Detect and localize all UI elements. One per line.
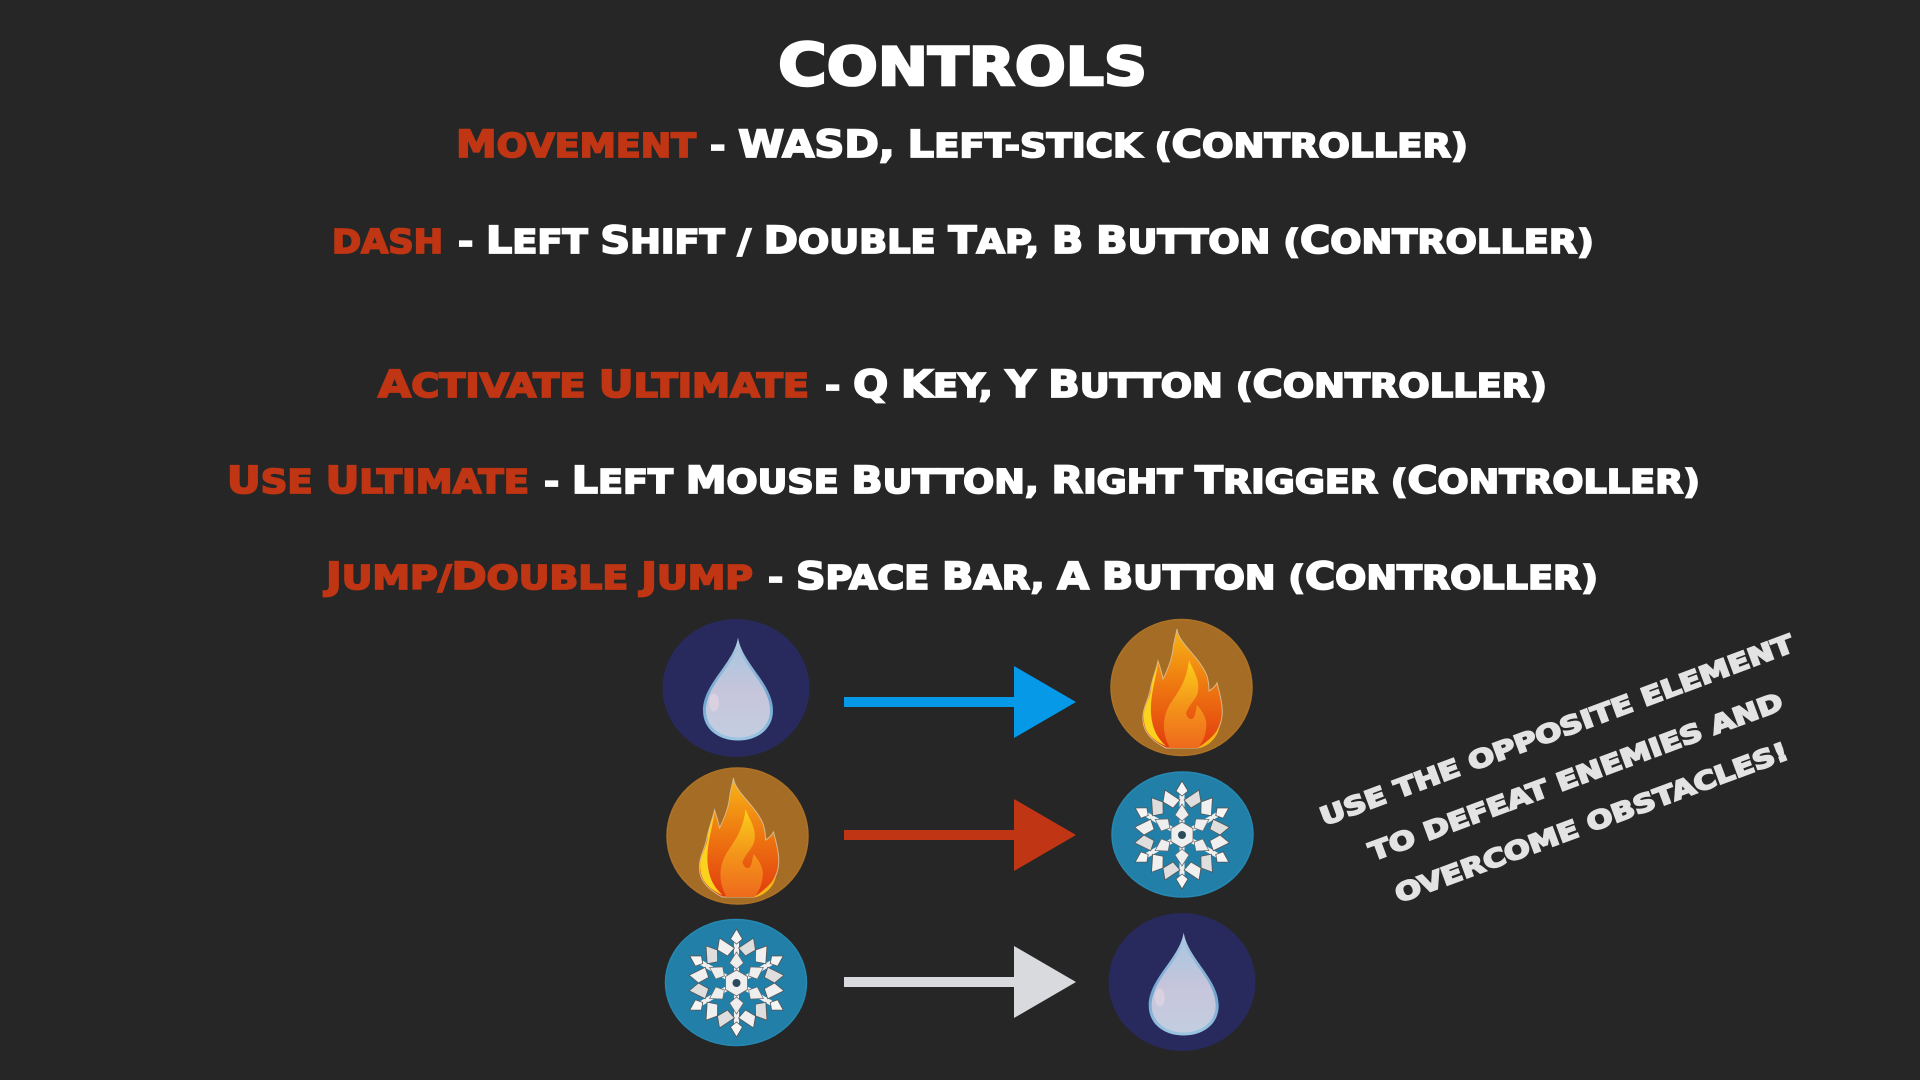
icon: ice (row 3 left) xyxy=(666,920,806,1046)
callout: rotated tip: USE THE OPPOSITE ELEMENT xyxy=(1316,629,1798,832)
arrow: blue xyxy=(844,666,1076,738)
binding: dash: - LEFT SHIFT / DOUBLE TAP, B BUTTON ( CONTROLLER) xyxy=(458,219,1594,262)
callout: rotated tip xyxy=(1316,629,1798,909)
callout: rotated tip: OVERCOME OBSTACLES! xyxy=(1391,737,1792,909)
binding: jump: - SPACE BAR, A BUTTON ( CONTROLLER) xyxy=(768,555,1598,598)
icon: ice (row 2 right) xyxy=(1112,772,1253,897)
label: activate ultimate: ACTIVATE ULTIMATE xyxy=(378,363,809,406)
control row: activate ultimate xyxy=(378,363,1547,406)
control row: dash xyxy=(332,219,1594,262)
label: dash: DASH xyxy=(332,222,443,261)
title: CONTROLS xyxy=(778,30,1147,99)
arrow: red xyxy=(844,799,1076,871)
binding: activate ultimate: - Q KEY, Y BUTTON ( CONTROLLER) xyxy=(825,363,1547,406)
label: jump: JUMP/ DOUBLE JUMP xyxy=(323,555,753,598)
arrow: grey xyxy=(844,946,1076,1018)
label: movement: MOVEMENT xyxy=(456,123,697,166)
label: use ultimate: USE ULTIMATE xyxy=(227,459,529,502)
control row: movement xyxy=(456,123,1468,166)
icon: water (row 3 right) xyxy=(1108,913,1256,1051)
icon: fire (row 2 left) xyxy=(667,768,808,904)
binding: movement: - WASD, LEFT-STICK ( CONTROLLER) xyxy=(710,123,1468,166)
icon: water (row 1 left) xyxy=(662,619,810,757)
binding: use ultimate: - LEFT MOUSE BUTTON, RIGHT TRIGGER ( CONTROLLER) xyxy=(544,459,1700,502)
control row: jump xyxy=(323,555,1598,598)
icon: fire (row 1 right) xyxy=(1111,620,1252,756)
callout: rotated tip: TO DEFEAT ENEMIES AND xyxy=(1365,687,1787,867)
control row: use ultimate xyxy=(227,459,1700,502)
